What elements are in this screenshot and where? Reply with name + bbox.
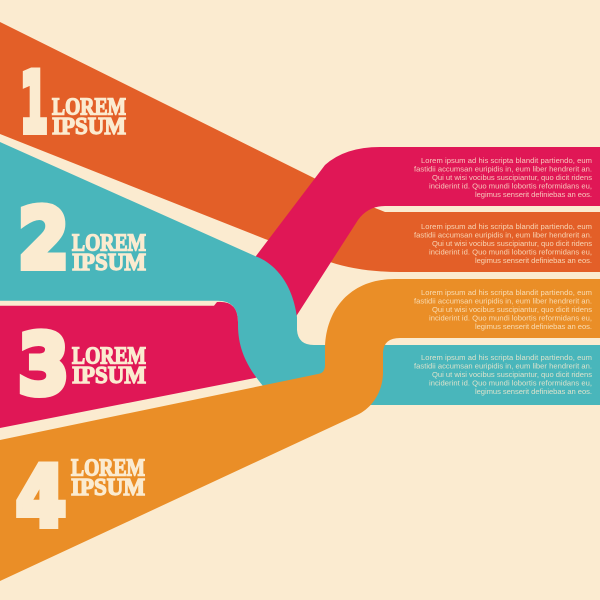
text block: orange-red band: fastidii accumsan euripidis in, eum liber hendrerit an. bbox=[414, 230, 592, 240]
label: lorem ipsum 1 bbox=[52, 94, 126, 140]
text block: amber band bbox=[414, 288, 592, 331]
number 2: 2 bbox=[18, 190, 69, 288]
section 4 heading bbox=[16, 448, 145, 546]
label: lorem ipsum 3: LOREM bbox=[72, 344, 146, 370]
ribbon 1: orange-red bbox=[0, 22, 600, 272]
label: lorem ipsum 2: LOREM bbox=[72, 230, 146, 256]
text block: amber band: legimus senserit definiebas an eos. bbox=[475, 322, 592, 331]
text block: orange-red band: inciderint id. Quo mundi lobortis reformidans eu, bbox=[429, 248, 592, 256]
text block: orange-red band: Qui ut wisi vocibus suscipiantur, quo dicit ridens bbox=[432, 239, 592, 248]
ribbon 3: crimson bbox=[0, 147, 600, 428]
text block: orange-red band: Lorem ipsum ad his scripta blandit partiendo, eum bbox=[421, 222, 592, 231]
text block: crimson band: fastidii accumsan euripidis in, eum liber hendrerit an. bbox=[414, 164, 592, 174]
number 3: 3 bbox=[18, 316, 69, 414]
text block: crimson band bbox=[414, 156, 592, 199]
label: lorem ipsum 1: IPSUM bbox=[52, 114, 126, 140]
number 4: 4 bbox=[16, 448, 66, 546]
text block: teal band: inciderint id. Quo mundi lobortis reformidans eu, bbox=[429, 378, 592, 388]
text block: amber band: Qui ut wisi vocibus suscipiantur, quo dicit ridens bbox=[432, 305, 592, 314]
text block: amber band: Lorem ipsum ad his scripta blandit partiendo, eum bbox=[421, 288, 592, 297]
label: lorem ipsum 4 bbox=[71, 456, 145, 501]
text block: teal band bbox=[414, 353, 592, 396]
text block: crimson band: Qui ut wisi vocibus suscipiantur, quo dicit ridens bbox=[432, 173, 592, 182]
section 2 heading bbox=[18, 190, 146, 288]
label: lorem ipsum 4: LOREM bbox=[71, 456, 145, 482]
label: lorem ipsum 3 bbox=[72, 344, 146, 389]
label: lorem ipsum 2 bbox=[72, 230, 146, 276]
section 3 heading bbox=[18, 316, 146, 414]
text block: amber band: inciderint id. Quo mundi lobortis reformidans eu, bbox=[429, 314, 592, 322]
label: lorem ipsum 3: IPSUM bbox=[72, 363, 146, 389]
text block: teal band: legimus senserit definiebas an eos. bbox=[475, 387, 592, 396]
text block: amber band: fastidii accumsan euripidis in, eum liber hendrerit an. bbox=[414, 296, 592, 306]
text block: crimson band: Lorem ipsum ad his scripta blandit partiendo, eum bbox=[421, 156, 592, 165]
label: lorem ipsum 1: LOREM bbox=[52, 94, 126, 120]
label: lorem ipsum 2: IPSUM bbox=[72, 250, 146, 276]
text block: teal band: Lorem ipsum ad his scripta blandit partiendo, eum bbox=[421, 353, 592, 362]
ribbon 4: amber bbox=[0, 279, 600, 581]
text block: teal band: fastidii accumsan euripidis in, eum liber hendrerit an. bbox=[414, 362, 592, 370]
text block: crimson band: legimus senserit definiebas an eos. bbox=[475, 190, 592, 199]
text block: crimson band: inciderint id. Quo mundi lobortis reformidans eu, bbox=[429, 182, 592, 190]
text block: orange-red band: legimus senserit definiebas an eos. bbox=[475, 256, 592, 265]
label: lorem ipsum 4: IPSUM bbox=[71, 475, 145, 501]
text block: orange-red band bbox=[414, 222, 592, 265]
section 1 heading bbox=[20, 54, 126, 152]
ribbon 2: teal bbox=[0, 142, 600, 405]
section 1 heading: 1 bbox=[20, 54, 48, 152]
text block: teal band: Qui ut wisi vocibus suscipiantur, quo dicit ridens bbox=[432, 370, 592, 379]
